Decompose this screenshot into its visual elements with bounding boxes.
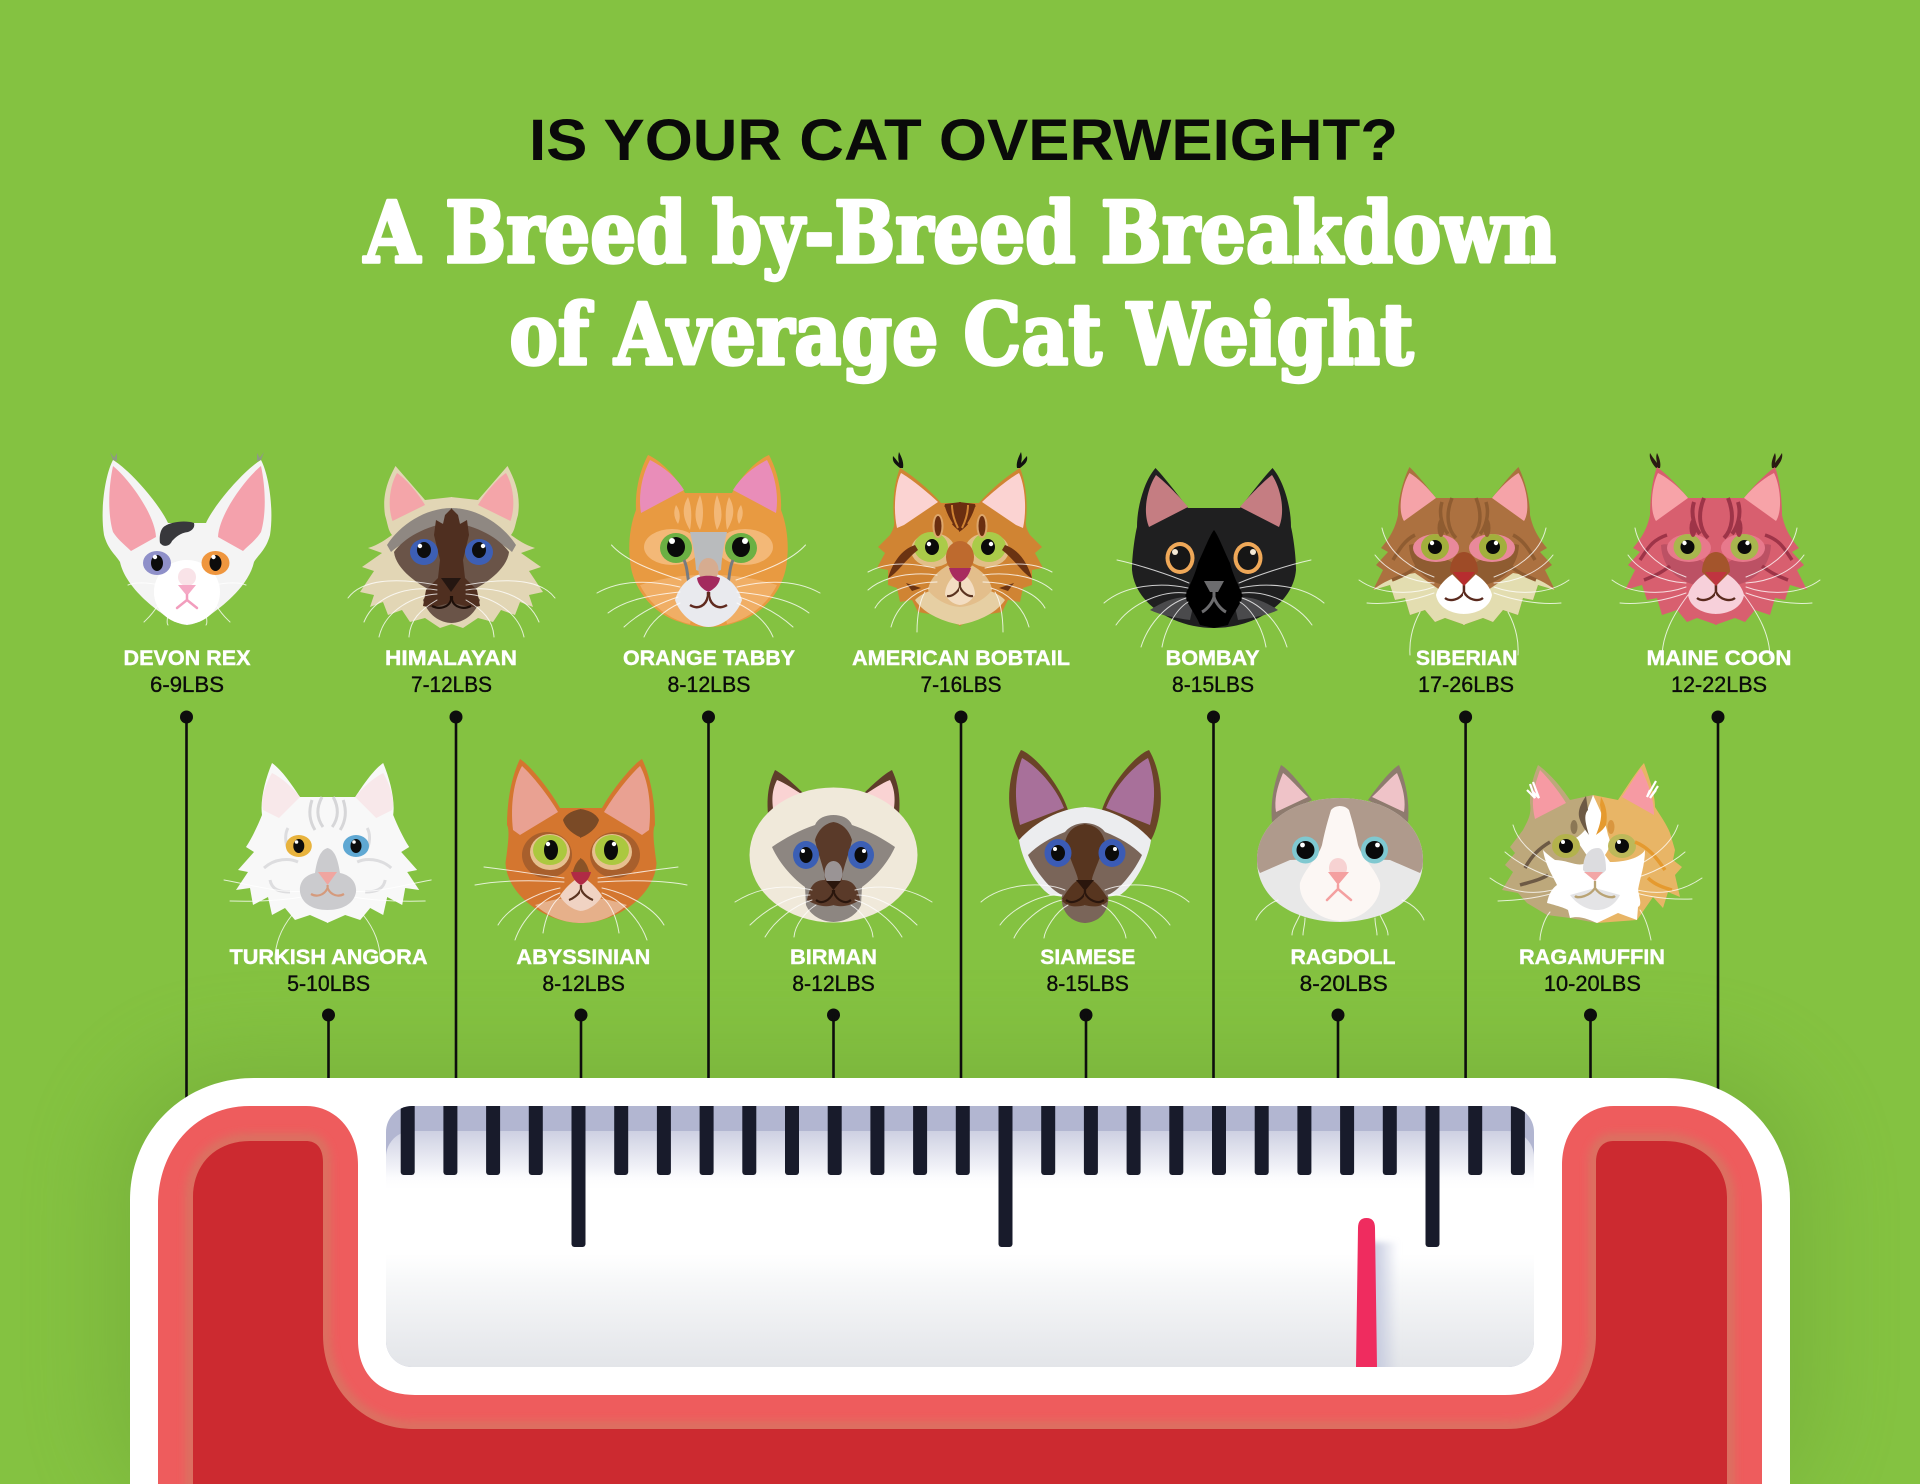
pointer: American Bobtail <box>954 710 968 1082</box>
icon: Orange Tabby cat face <box>597 455 820 637</box>
panel: scale <box>130 1078 1790 1484</box>
label: Birman name: BIRMAN <box>790 946 877 969</box>
label: Ragdoll name: RAGDOLL <box>1290 946 1396 969</box>
scale salmon body <box>158 1106 1762 1484</box>
icon: Siamese cat face <box>981 750 1189 938</box>
label: Himalayan weight: 7-12LBS <box>411 672 492 697</box>
icon: Siberian cat face <box>1359 467 1569 655</box>
panel: American Bobtail <box>852 452 1070 1082</box>
icon: Maine Coon cat face <box>1612 453 1820 658</box>
label: Orange Tabby weight: 8-12LBS <box>668 672 750 697</box>
icon: Turkish Angora cat face <box>224 763 431 960</box>
panel: Ragdoll <box>1256 765 1424 1082</box>
pointer: Siberian <box>1459 710 1472 1082</box>
label: Turkish Angora name: TURKISH ANGORA <box>230 946 428 969</box>
pointer: Himalayan <box>450 710 462 1082</box>
label: Devon Rex name: DEVON REX <box>124 647 250 670</box>
panel: Siamese <box>981 750 1189 1082</box>
panel: Ragamuffin <box>1490 763 1702 1082</box>
pointer: Siamese <box>1080 1008 1092 1082</box>
icon: American Bobtail cat face <box>868 452 1052 632</box>
icon: Abyssinian cat face <box>475 759 687 940</box>
heading line one: A Breed by-Breed Breakdown <box>363 183 1556 282</box>
label: Orange Tabby name: ORANGE TABBY <box>623 647 795 670</box>
panel: Siberian <box>1359 467 1569 1082</box>
label: Abyssinian weight: 8-12LBS <box>542 971 625 996</box>
pointer: Orange Tabby <box>702 710 715 1082</box>
icon: Birman cat face <box>735 770 932 937</box>
panel: Devon Rex <box>103 452 271 1105</box>
label: Abyssinian name: ABYSSINIAN <box>516 946 650 969</box>
scale dark red body <box>193 1141 1727 1484</box>
title: is your cat overweight: IS YOUR CAT OVERWEIGHT? <box>529 108 1398 173</box>
panel: Orange Tabby <box>597 455 820 1082</box>
label: Ragdoll weight: 8-20LBS <box>1300 971 1388 996</box>
label: Siberian weight: 17-26LBS <box>1418 672 1514 697</box>
panel: Himalayan <box>348 466 555 1082</box>
label: Devon Rex weight: 6-9LBS <box>150 672 224 697</box>
label: Ragamuffin name: RAGAMUFFIN <box>1519 946 1665 969</box>
panel: Bombay <box>1104 468 1324 1082</box>
panel: Abyssinian <box>475 759 687 1082</box>
scale salmon inner shade <box>193 1141 1727 1484</box>
tick marks <box>401 1100 1525 1247</box>
label: Bombay weight: 8-15LBS <box>1172 672 1254 697</box>
heading line two: of Average Cat Weight <box>510 285 1414 384</box>
pointer: Turkish Angora <box>322 1008 335 1082</box>
label: Siamese name: SIAMESE <box>1040 946 1135 969</box>
label: Siamese weight: 8-15LBS <box>1046 971 1129 996</box>
panel: Maine Coon <box>1612 453 1820 1105</box>
needle <box>1356 1218 1377 1367</box>
label: Ragamuffin weight: 10-20LBS <box>1544 971 1641 996</box>
pointer: Ragamuffin <box>1584 1008 1597 1082</box>
label: Bombay name: BOMBAY <box>1166 647 1260 670</box>
label: Himalayan name: HIMALAYAN <box>385 647 517 670</box>
pointer: Maine Coon <box>1712 710 1724 1105</box>
icon: Himalayan cat face <box>348 466 555 637</box>
label: Maine Coon weight: 12-22LBS <box>1671 672 1767 697</box>
icon: Devon Rex cat face <box>103 452 271 625</box>
icon: Bombay cat face <box>1104 468 1324 647</box>
label: Birman weight: 8-12LBS <box>792 971 875 996</box>
label: Turkish Angora weight: 5-10LBS <box>287 971 370 996</box>
label: American Bobtail name: AMERICAN BOBTAIL <box>852 647 1070 670</box>
pointer: Abyssinian <box>574 1008 588 1082</box>
pointer: Ragdoll <box>1332 1008 1344 1082</box>
pointer: Bombay <box>1207 710 1220 1082</box>
icon: Ragamuffin cat face <box>1490 763 1702 940</box>
label: Siberian name: SIBERIAN <box>1416 647 1517 670</box>
panel: Turkish Angora <box>224 763 431 1082</box>
scale white frame <box>130 1078 1790 1484</box>
pointer: Birman <box>827 1008 840 1082</box>
needle shadow <box>1375 1240 1394 1367</box>
icon: Ragdoll cat face <box>1256 765 1424 935</box>
panel: Birman <box>735 770 932 1082</box>
label: Maine Coon name: MAINE COON <box>1646 647 1792 670</box>
label: American Bobtail weight: 7-16LBS <box>920 672 1002 697</box>
scale window <box>386 1106 1534 1367</box>
pointer: Devon Rex <box>180 710 193 1105</box>
